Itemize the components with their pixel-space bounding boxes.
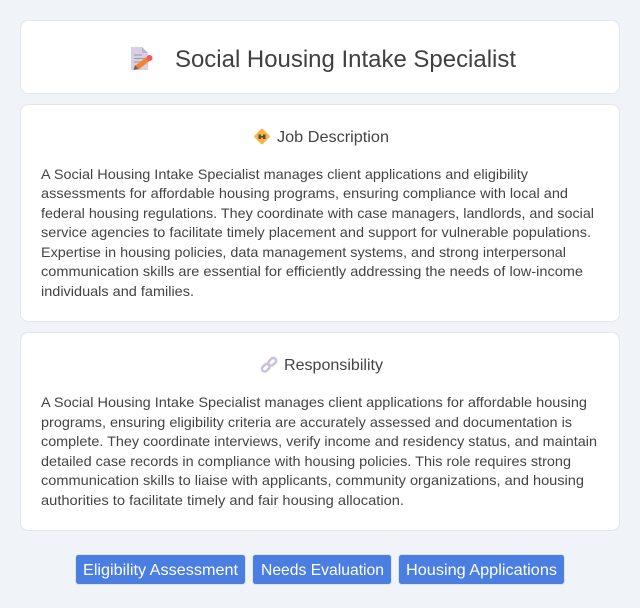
tag: housing applications bbox=[398, 554, 564, 584]
icon: job description diamond bbox=[254, 128, 270, 145]
text block: job description bbox=[41, 166, 594, 299]
tag: housing applications: Housing Applications bbox=[406, 562, 557, 579]
text block: responsibility bbox=[41, 394, 597, 508]
heading: job description: Job Description bbox=[277, 129, 389, 146]
text block: responsibility: communication skills to liaise with applicants, community organizations, and housing bbox=[41, 472, 584, 488]
panel: job description card bbox=[20, 104, 620, 322]
tag: eligibility assessment bbox=[76, 554, 246, 584]
text block: responsibility: complete. They coordinate interviews, verify income and residency status, and maintain bbox=[41, 433, 597, 449]
panel: title card bbox=[20, 20, 620, 94]
icon: document with pencil bbox=[131, 47, 152, 70]
heading: responsibility: Responsibility bbox=[284, 357, 383, 374]
text block: job description: Expertise in housing policies, data management systems, and strong interpersonal bbox=[41, 244, 566, 260]
tag: needs evaluation: Needs Evaluation bbox=[261, 562, 384, 579]
panel: responsibility card bbox=[20, 332, 620, 531]
icon: chain link bbox=[261, 357, 277, 373]
tag: eligibility assessment: Eligibility Assessment bbox=[83, 562, 239, 579]
text block: responsibility: A Social Housing Intake Specialist manages client applications for affordable housing bbox=[41, 394, 587, 410]
tag: needs evaluation bbox=[252, 554, 392, 584]
text block: responsibility: authorities to facilitate timely and fair housing allocation. bbox=[41, 492, 404, 508]
text block: job description: assessments for affordable housing programs, ensuring compliance with local and bbox=[41, 185, 568, 201]
title: Social Housing Intake Specialist bbox=[175, 46, 516, 73]
text block: job description: individuals and families. bbox=[41, 283, 194, 299]
text block: job description: service agencies to facilitate timely placement and support for vulnerable populations. bbox=[41, 224, 591, 240]
text block: responsibility: detailed case records in compliance with housing policies. This role requires strong bbox=[41, 453, 571, 469]
text block: job description: federal housing regulations. They coordinate with case managers, landlords, and social bbox=[41, 205, 594, 221]
text block: responsibility: programs, ensuring eligibility criteria are accurately assessed and documentation is bbox=[41, 414, 572, 430]
text block: job description: A Social Housing Intake Specialist manages client applications and eligibility bbox=[41, 166, 528, 182]
text block: job description: communication skills are essential for efficiently addressing the needs of low-income bbox=[41, 263, 583, 279]
